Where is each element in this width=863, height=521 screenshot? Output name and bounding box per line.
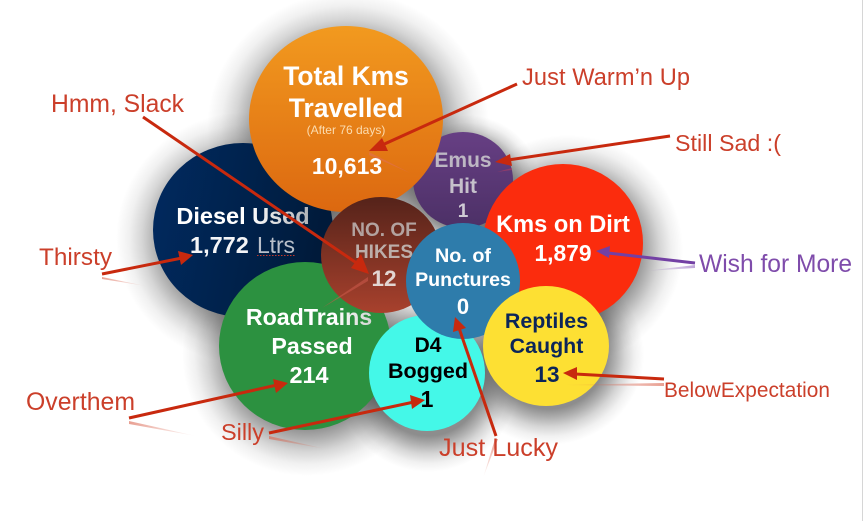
bubble: total kms travelled: (After 76 days) bbox=[307, 123, 385, 137]
arrow reflections bbox=[102, 152, 695, 478]
bubble: total kms travelled bbox=[249, 26, 443, 212]
bubble: total kms travelled: Total Kms bbox=[283, 61, 409, 91]
bubble: number of hikes: HIKES bbox=[355, 242, 413, 263]
bubble: road trains passed: Passed bbox=[271, 333, 353, 359]
bubble: d4 bogged bbox=[369, 315, 485, 431]
bubble: reptiles caught: Caught bbox=[510, 334, 583, 358]
bubble: diesel used bbox=[153, 143, 333, 317]
arrow: silly bbox=[269, 395, 425, 433]
bubble: d4 bogged: D4 bbox=[415, 334, 442, 357]
label: thirsty: Thirsty bbox=[39, 244, 113, 271]
bubble: d4 bogged: 1 bbox=[421, 386, 434, 412]
bubble: road trains passed: RoadTrains bbox=[246, 304, 372, 330]
arrow: just warm'n up bbox=[369, 84, 517, 151]
label: hmm, slack: Hmm, Slack bbox=[51, 91, 185, 118]
bubble: emus hit: Emus bbox=[434, 149, 492, 172]
arrow: still sad bbox=[495, 136, 670, 166]
bubble: road trains passed bbox=[219, 262, 391, 430]
bubble: diesel used: Diesel Used bbox=[176, 203, 310, 229]
bubble: total kms travelled: 10,613 bbox=[312, 153, 382, 179]
bubble: number of hikes bbox=[321, 197, 441, 313]
bubble: d4 bogged: Bogged bbox=[388, 359, 468, 383]
arrow: wish for more bbox=[596, 246, 695, 263]
bubble: number of hikes: NO. OF bbox=[351, 220, 417, 241]
bubble: number of punctures: 0 bbox=[457, 294, 469, 319]
label: just lucky: Just Lucky bbox=[439, 434, 558, 462]
arrow: just lucky bbox=[453, 317, 496, 436]
drop shadow behind bubbles bbox=[116, 0, 683, 476]
bubble: kms on dirt: Kms on Dirt bbox=[496, 212, 630, 238]
bubble: diesel used: Ltrs bbox=[257, 232, 295, 258]
right edge line bbox=[862, 0, 863, 521]
arrow: thirsty bbox=[102, 251, 193, 274]
bubble: number of punctures bbox=[406, 223, 520, 339]
bubble: emus hit: Hit bbox=[449, 175, 477, 198]
bubble: kms on dirt: 1,879 bbox=[534, 240, 592, 266]
bubble: reptiles caught: 13 bbox=[534, 362, 560, 387]
bubble: number of punctures: Punctures bbox=[415, 269, 511, 291]
bubble: reptiles caught bbox=[483, 286, 609, 406]
bubble: reptiles caught: Reptiles bbox=[505, 309, 588, 333]
arrow: hmm, slack bbox=[143, 117, 369, 274]
bubble: diesel used: 1,772 bbox=[190, 232, 249, 258]
label: silly: Silly bbox=[221, 419, 264, 445]
label: wish for more: Wish for More bbox=[699, 251, 852, 278]
label: below expectation: BelowExpectation bbox=[664, 379, 830, 402]
bubble: road trains passed: 214 bbox=[289, 362, 329, 388]
bubble: emus hit bbox=[413, 132, 513, 228]
bubble: kms on dirt bbox=[483, 164, 643, 322]
bubble: emus hit: 1 bbox=[458, 201, 469, 222]
arrow: overthem bbox=[129, 379, 288, 418]
arrow: below expectation bbox=[563, 367, 664, 380]
bubble: number of hikes: 12 bbox=[371, 266, 397, 291]
label: just warm'n up: Just Warm’n Up bbox=[522, 65, 690, 91]
bubble: number of punctures: No. of bbox=[435, 245, 491, 267]
label: still sad: Still Sad :( bbox=[675, 130, 781, 156]
label: overthem: Overthem bbox=[26, 389, 135, 416]
bubble: total kms travelled: Travelled bbox=[289, 93, 403, 123]
